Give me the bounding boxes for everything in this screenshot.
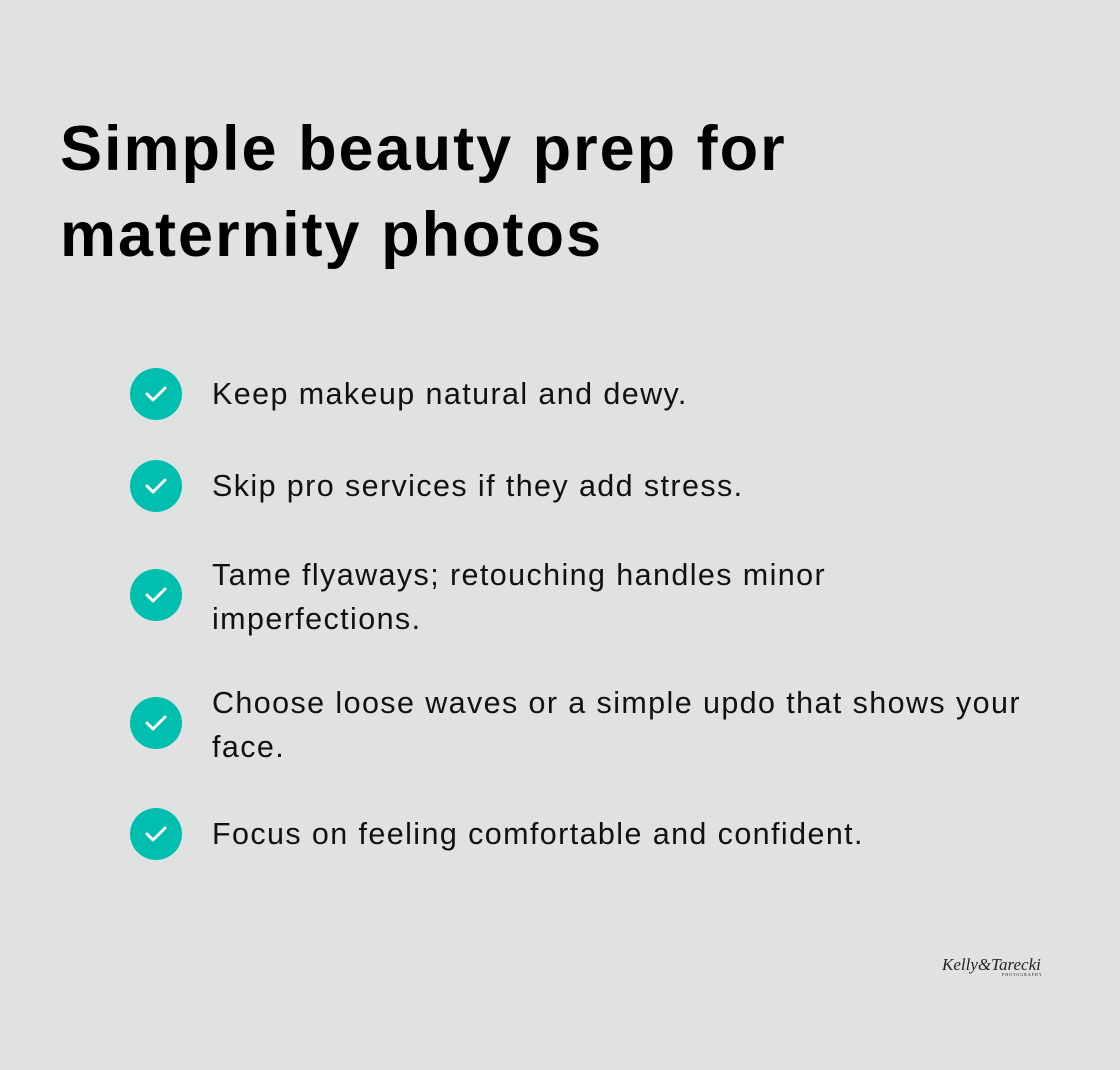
item 3 bbox=[130, 558, 826, 636]
item 2 bbox=[130, 460, 744, 512]
title: Simple beauty prep for bbox=[60, 114, 787, 184]
item 4: face. bbox=[212, 730, 285, 764]
item 5 bbox=[130, 808, 864, 860]
item 1: Keep makeup natural and dewy. bbox=[212, 377, 688, 411]
logo signature: PHOTOGRAPHY bbox=[1002, 972, 1043, 977]
title bbox=[60, 114, 787, 270]
item 4: Choose loose waves or a simple updo that shows your bbox=[212, 686, 1021, 720]
item 1 bbox=[130, 368, 688, 420]
item 2: Skip pro services if they add stress. bbox=[212, 469, 744, 503]
logo signature: Kelly&Tarecki bbox=[942, 955, 1041, 974]
title: maternity photos bbox=[60, 200, 603, 270]
item 3: imperfections. bbox=[212, 602, 421, 636]
item 3: Tame flyaways; retouching handles minor bbox=[212, 558, 826, 592]
item 4 bbox=[130, 686, 1021, 764]
item 5: Focus on feeling comfortable and confident. bbox=[212, 817, 864, 851]
